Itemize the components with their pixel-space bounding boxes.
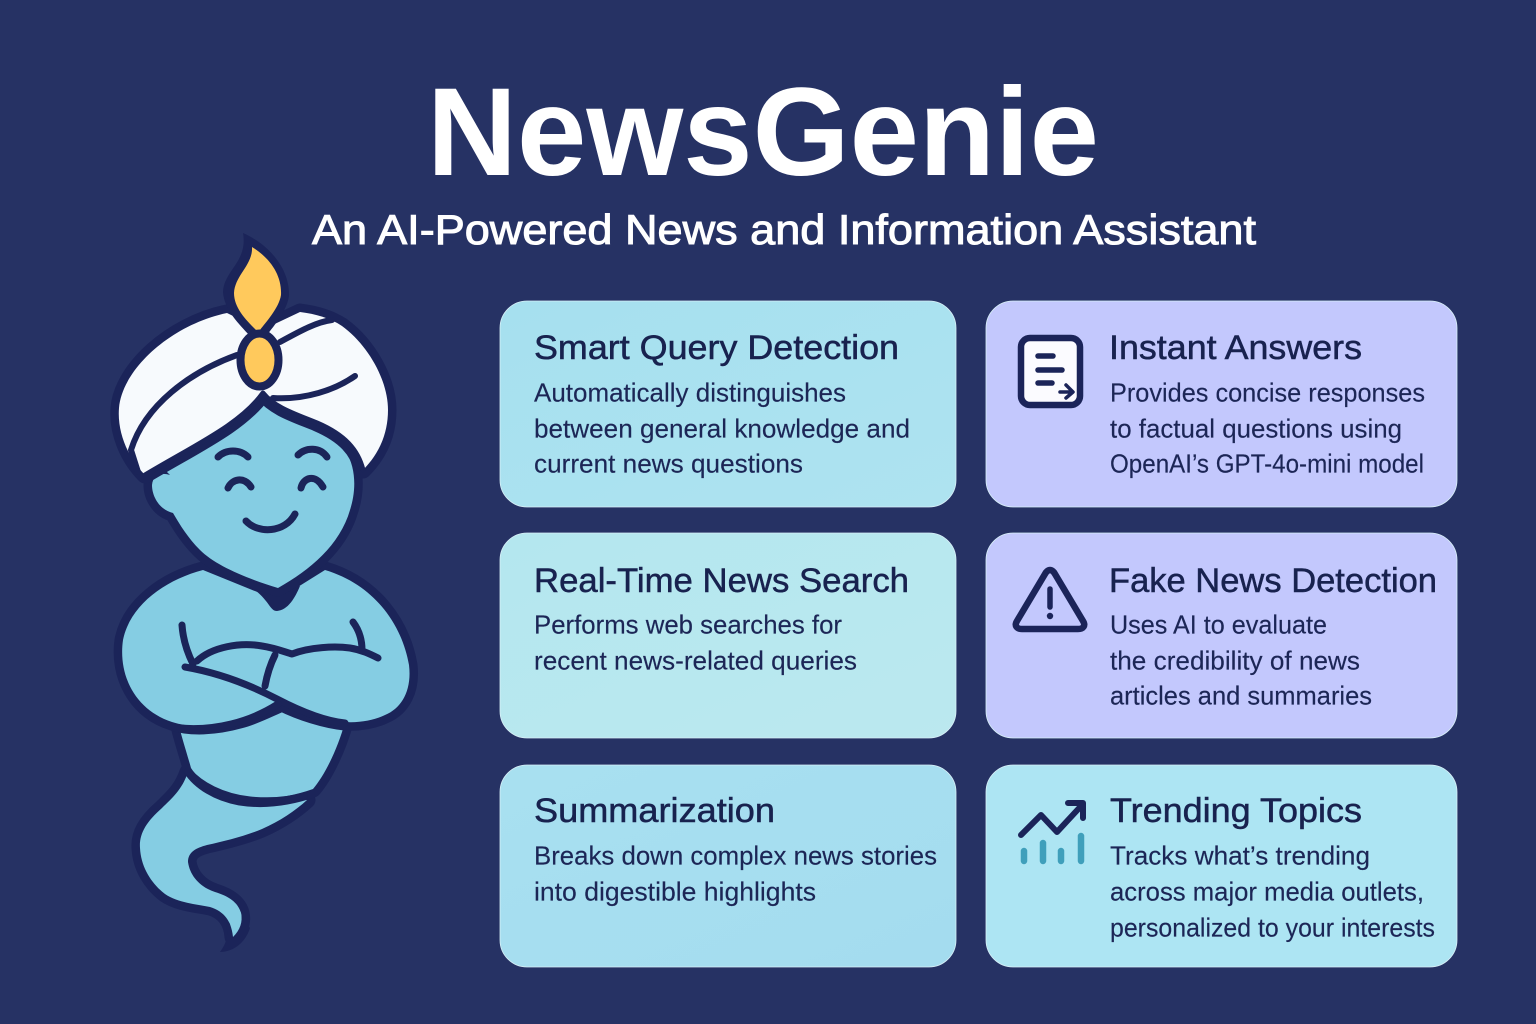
right eyebrow [298, 449, 327, 457]
description: across major media outlets, [1110, 876, 1424, 906]
heading: Real-Time News Search [534, 562, 909, 600]
description: recent news-related queries [534, 646, 857, 676]
folded arm lines [180, 622, 378, 729]
heading: Smart Query Detection [534, 329, 899, 367]
description [534, 840, 937, 906]
smile [246, 514, 295, 530]
icon: document with arrow [1021, 338, 1080, 405]
neck notch [255, 586, 300, 611]
genie torso [180, 700, 345, 799]
turban flame ornament [234, 247, 281, 330]
description: current news questions [534, 448, 803, 478]
panel: fake news detection [986, 533, 1457, 738]
genie arms and chest [122, 570, 410, 726]
description [1110, 610, 1372, 710]
right eye [301, 478, 323, 488]
flame outline [223, 233, 289, 336]
panel: summarization [500, 765, 956, 967]
description: Uses AI to evaluate [1110, 610, 1327, 640]
title: NewsGenie [427, 63, 1099, 202]
description: into digestible highlights [534, 876, 816, 906]
description: Performs web searches for [534, 610, 842, 640]
description [534, 610, 857, 676]
heading: Fake News Detection [1109, 562, 1437, 600]
panel: instant answers [986, 301, 1457, 507]
turban fold lines [131, 320, 363, 475]
description: articles and summaries [1110, 680, 1372, 710]
left eyebrow [218, 451, 248, 457]
turban gem [240, 334, 278, 386]
genie mascot [119, 233, 410, 952]
description: Automatically distinguishes [534, 378, 846, 408]
genie face [152, 396, 354, 588]
subtitle: An AI-Powered News and Information Assistant [312, 206, 1256, 253]
heading: Summarization [534, 792, 775, 830]
waist line [188, 771, 304, 801]
description [1110, 840, 1435, 942]
description: to factual questions using [1110, 414, 1402, 444]
tail tip fill [224, 897, 242, 937]
heading: Instant Answers [1109, 329, 1362, 367]
description [534, 378, 910, 478]
icon: trend chart [1021, 803, 1083, 861]
panel: trending topics [986, 765, 1457, 967]
icon: warning triangle [1016, 570, 1084, 629]
genie turban [119, 312, 388, 475]
description: between general knowledge and [534, 414, 910, 444]
tail tip outline [220, 915, 250, 952]
description: Tracks what’s trending [1110, 840, 1370, 870]
description: Provides concise responses [1110, 378, 1425, 408]
heading: Trending Topics [1110, 792, 1362, 830]
left eye [228, 480, 251, 488]
panel: real-time news search [500, 533, 956, 738]
description: personalized to your interests [1110, 912, 1435, 942]
description: Breaks down complex news stories [534, 840, 937, 870]
panel: smart query detection [500, 301, 956, 507]
genie tail [140, 770, 307, 937]
description [1110, 378, 1425, 478]
description: OpenAI’s GPT-4o-mini model [1110, 448, 1424, 478]
description: the credibility of news [1110, 646, 1360, 676]
